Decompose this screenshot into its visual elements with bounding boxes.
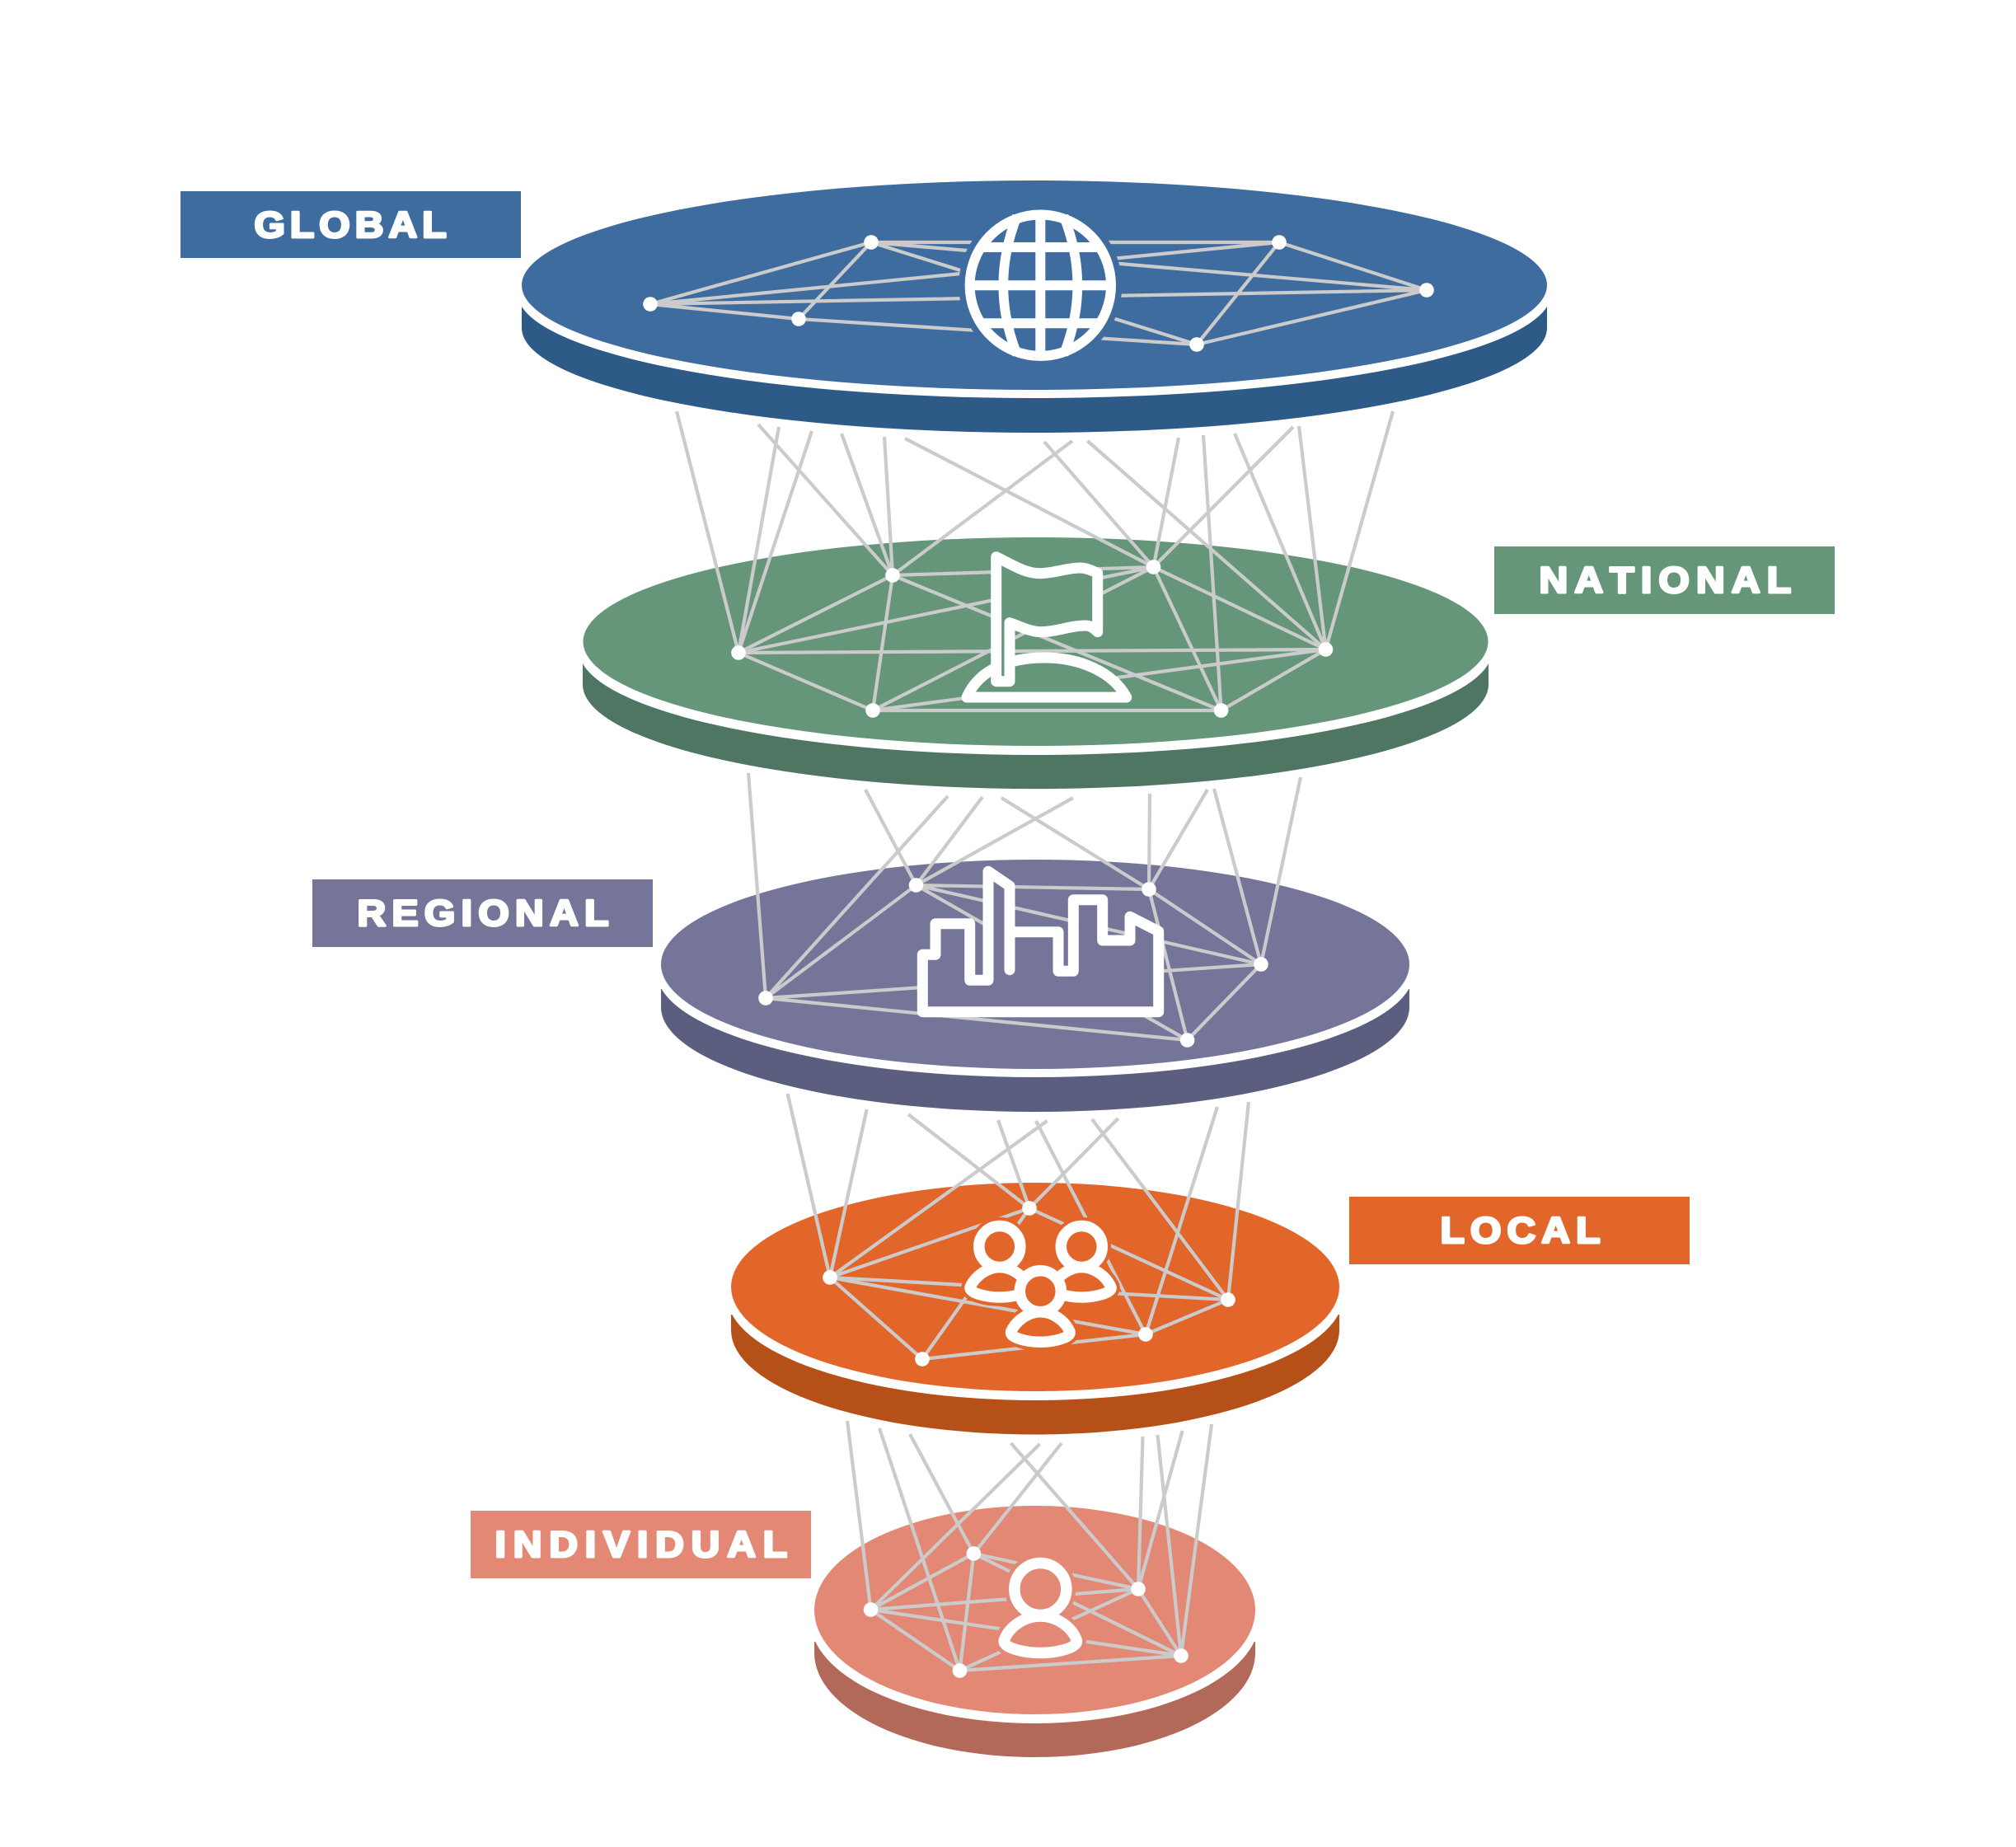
disk side: national [583, 663, 1489, 789]
disk side: local [731, 1315, 1339, 1435]
level: global [181, 180, 1551, 433]
label: individual [471, 1511, 811, 1578]
network nodes: global [643, 235, 1434, 352]
disk rim: local [727, 1191, 1343, 1400]
network nodes: regional [758, 878, 1268, 1048]
label: individual: INDIVIDUAL [495, 1524, 795, 1565]
disk top: global [522, 180, 1547, 390]
disk side: regional [661, 989, 1409, 1112]
level: individual [471, 1421, 1259, 1757]
disk top: local [731, 1183, 1339, 1391]
level: local [727, 1094, 1690, 1435]
label: national [1494, 546, 1835, 614]
icon: flag on hill [967, 557, 1127, 697]
disk side: global [522, 307, 1547, 433]
level: regional [312, 773, 1414, 1112]
label: local [1349, 1197, 1690, 1264]
icon: group of people [970, 1226, 1111, 1342]
network lines: individual [847, 1421, 1212, 1671]
icon halo: people [970, 1226, 1111, 1342]
disk rim: national [579, 546, 1492, 755]
label: regional: REGIONAL [358, 893, 615, 934]
person: right [1052, 1226, 1111, 1297]
label: global: GLOBAL [254, 204, 452, 246]
disk top: individual [814, 1506, 1255, 1714]
disk top: national [584, 537, 1489, 746]
disk rim: global [518, 189, 1551, 398]
person: left [970, 1226, 1029, 1297]
disk rim: individual [809, 1514, 1259, 1723]
network lines: national [677, 411, 1393, 710]
disk side: individual [814, 1642, 1255, 1757]
network lines: regional [748, 773, 1301, 1040]
label: global [181, 191, 521, 258]
person: centre [1010, 1271, 1070, 1342]
level: national [579, 411, 1835, 789]
network lines: local [788, 1094, 1249, 1359]
label: local: LOCAL [1441, 1210, 1606, 1251]
disk rim: regional [657, 868, 1414, 1077]
icon: factory [922, 871, 1159, 1012]
label: national: NATIONAL [1540, 560, 1798, 601]
network lines: global [650, 242, 1427, 345]
network nodes: individual [864, 1546, 1189, 1678]
network nodes: local [823, 1201, 1235, 1366]
icon: person [1004, 1563, 1076, 1653]
label: regional [312, 879, 653, 947]
icon: globe [959, 204, 1122, 367]
disk top: regional [661, 860, 1409, 1069]
network nodes: national [731, 560, 1333, 718]
